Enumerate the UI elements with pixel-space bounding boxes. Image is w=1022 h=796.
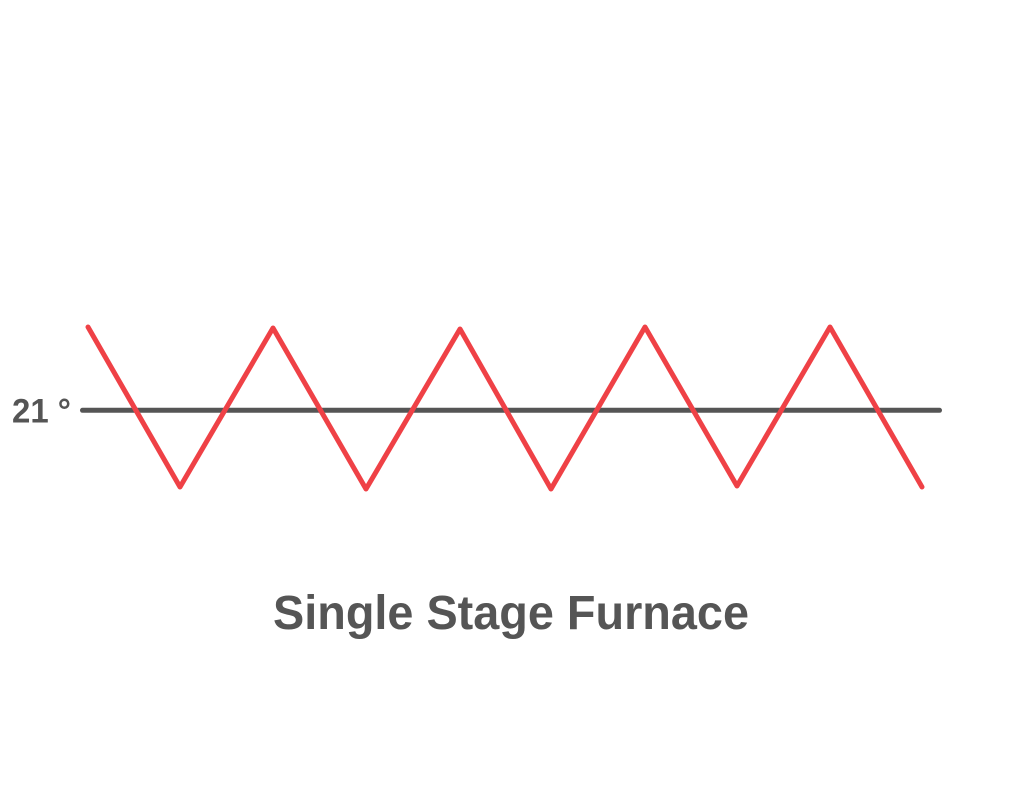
temperature zigzag line	[88, 327, 922, 489]
setpoint label: 21 degrees: 21 °	[12, 392, 71, 430]
title: Single Stage Furnace	[273, 587, 749, 640]
setpoint line	[82, 408, 940, 413]
